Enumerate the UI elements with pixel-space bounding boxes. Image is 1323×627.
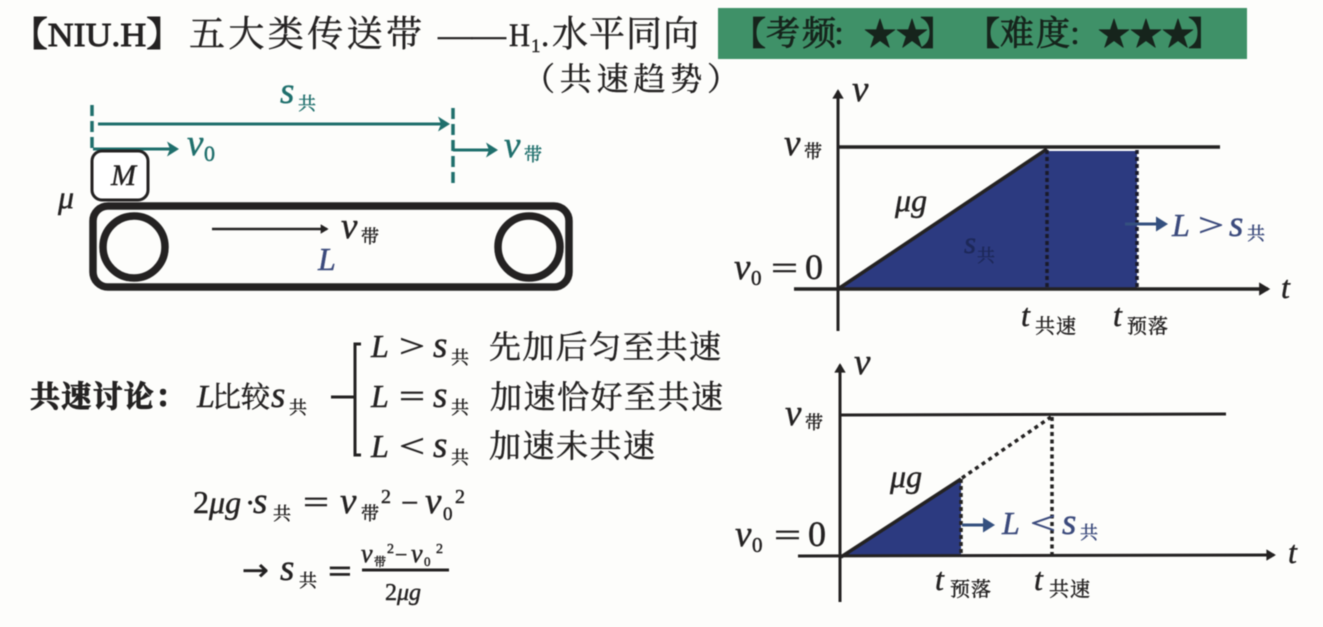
banner: exam frequency and difficulty: 【 bbox=[733, 17, 766, 53]
arrow: v0: 0 bbox=[204, 141, 215, 166]
banner: exam frequency and difficulty: ： bbox=[1068, 19, 1098, 52]
label t common: 共速 bbox=[1035, 315, 1076, 338]
bracket bbox=[331, 344, 361, 455]
label t fall: 预落 bbox=[950, 578, 991, 601]
label t common bbox=[1034, 561, 1090, 601]
case: L less: 共 bbox=[451, 448, 469, 468]
banner: exam frequency and difficulty: ★★ bbox=[864, 16, 928, 52]
title: H bbox=[509, 18, 530, 54]
case: L greater: 共 bbox=[451, 348, 469, 368]
case: L less: s bbox=[433, 425, 447, 466]
case: L greater: > bbox=[399, 329, 425, 365]
case: L less bbox=[370, 425, 655, 468]
displacement marker s: 共 bbox=[298, 94, 316, 114]
title: 1 bbox=[531, 36, 540, 57]
banner: exam frequency and difficulty bbox=[718, 8, 1247, 59]
axis label t: t bbox=[1281, 269, 1291, 305]
formula: kinematics: · bbox=[245, 485, 255, 520]
formula: common-speed distance: 2 bbox=[387, 542, 394, 557]
displacement marker s: s bbox=[280, 71, 294, 112]
formula: common-speed distance: 2 bbox=[436, 542, 443, 557]
arrow: belt speed bbox=[212, 206, 379, 247]
belt bbox=[93, 206, 569, 287]
length L: L bbox=[317, 241, 336, 277]
label v belt bbox=[785, 393, 823, 434]
label s in area bbox=[964, 225, 995, 266]
friction label: μ bbox=[57, 179, 74, 215]
case: L equal: s bbox=[433, 375, 447, 416]
formula: common-speed distance: 0 bbox=[424, 554, 430, 569]
discussion label: 共速讨论： bbox=[30, 381, 185, 414]
label s in area: 共 bbox=[977, 246, 995, 266]
formula: kinematics: − bbox=[401, 485, 418, 520]
dotted marker: common-speed time bbox=[1045, 150, 1049, 289]
callout L less: L bbox=[1001, 505, 1020, 541]
label v0: v bbox=[734, 247, 751, 288]
arrow: belt speed: 带 bbox=[361, 227, 379, 247]
formula: kinematics: v bbox=[425, 481, 442, 522]
case: L greater: s bbox=[433, 325, 447, 366]
formula: common-speed distance: 带 bbox=[374, 554, 386, 569]
label t common: t bbox=[1034, 561, 1044, 597]
callout L greater: L bbox=[1171, 207, 1190, 243]
label slope: μg bbox=[889, 458, 922, 494]
right wheel bbox=[498, 216, 560, 278]
callout L less: 共 bbox=[1080, 523, 1098, 543]
callout L greater: > bbox=[1198, 208, 1224, 244]
banner: exam frequency and difficulty: 考频 bbox=[766, 15, 837, 53]
callout L greater: s bbox=[1229, 204, 1243, 245]
formula: kinematics: 2 bbox=[193, 484, 209, 520]
title: 水平同向 bbox=[552, 14, 699, 54]
axis label v: v bbox=[852, 69, 869, 110]
case: L greater bbox=[370, 325, 721, 368]
banner: exam frequency and difficulty: 【 bbox=[967, 17, 1000, 53]
formula: kinematics: μg bbox=[208, 484, 241, 520]
shaded area bbox=[843, 479, 961, 556]
label t fall bbox=[935, 561, 991, 601]
formula: common-speed distance bbox=[242, 539, 449, 606]
formula: common-speed distance: → bbox=[242, 553, 269, 588]
label v0 bbox=[734, 247, 823, 290]
v axis bbox=[836, 91, 840, 331]
formula: kinematics: s bbox=[253, 481, 267, 522]
formula: common-speed distance: v bbox=[361, 539, 373, 568]
label s in area: s bbox=[964, 225, 976, 260]
label t common bbox=[1021, 297, 1076, 338]
case: L less: L bbox=[370, 428, 389, 464]
case: L less: < bbox=[399, 429, 425, 465]
dotted marker: fall time bbox=[1135, 150, 1139, 289]
chart: L less than s bbox=[735, 342, 1298, 602]
axis label v: v bbox=[854, 342, 871, 383]
formula: common-speed distance: μg bbox=[396, 580, 421, 606]
formula: kinematics: v bbox=[340, 481, 357, 522]
label v0: v bbox=[735, 514, 752, 555]
case: L equal: = bbox=[399, 379, 425, 415]
dotted extension bbox=[962, 417, 1051, 478]
formula: kinematics: 2 bbox=[381, 486, 391, 508]
label v belt: 带 bbox=[805, 413, 823, 433]
case: L equal: 共 bbox=[451, 398, 469, 418]
chart: L greater than s bbox=[734, 69, 1291, 338]
block M: M bbox=[110, 159, 138, 192]
case: L greater: 先加后匀至共速 bbox=[489, 329, 721, 365]
block M bbox=[92, 151, 148, 200]
discussion label: 比较 bbox=[212, 381, 271, 414]
dotted marker: common-speed time bbox=[1050, 417, 1054, 556]
label t fall: t bbox=[1113, 297, 1123, 333]
formula: common-speed distance: v bbox=[411, 539, 423, 568]
label v0 bbox=[735, 514, 826, 557]
dotted marker: fall time bbox=[959, 479, 963, 556]
panel: common-speed discussion bbox=[30, 325, 723, 468]
title: —— bbox=[437, 18, 507, 54]
label v0: = bbox=[771, 251, 798, 287]
case: L equal: 加速恰好至共速 bbox=[490, 379, 723, 415]
callout L greater bbox=[1125, 204, 1265, 245]
formula: common-speed distance: 共 bbox=[299, 571, 317, 591]
belt speed line bbox=[840, 414, 1226, 415]
banner: exam frequency and difficulty: 】 bbox=[920, 17, 953, 53]
banner: exam frequency and difficulty: ： bbox=[832, 19, 862, 52]
panel: conveyor belt diagram bbox=[57, 71, 569, 287]
label v belt bbox=[784, 123, 822, 164]
formula: kinematics: = bbox=[303, 485, 329, 521]
slope line bbox=[841, 479, 961, 557]
axis label t: t bbox=[1288, 534, 1298, 570]
formula: common-speed distance: = bbox=[328, 554, 352, 590]
formula: common-speed distance: s bbox=[280, 548, 294, 589]
arrow: v belt: v bbox=[504, 125, 521, 166]
formula: kinematics: 共 bbox=[273, 504, 291, 524]
case: L equal: L bbox=[370, 378, 389, 414]
label v0: 0 bbox=[805, 247, 823, 287]
label t fall: t bbox=[935, 561, 945, 597]
formula: kinematics: 0 bbox=[443, 504, 452, 525]
banner: exam frequency and difficulty: ★★★ bbox=[1098, 16, 1194, 52]
discussion label bbox=[30, 375, 307, 418]
discussion label: L bbox=[196, 378, 215, 414]
label v0: 0 bbox=[752, 533, 762, 557]
formula: kinematics bbox=[193, 481, 465, 525]
discussion label: s bbox=[271, 375, 285, 416]
v axis bbox=[838, 365, 842, 602]
title bbox=[12, 14, 699, 57]
label t fall bbox=[1113, 297, 1168, 338]
formula: common-speed distance: 2 bbox=[385, 580, 397, 606]
title: 【NIU.H】 bbox=[12, 17, 182, 54]
title: 五大类传送带 bbox=[189, 14, 422, 54]
label slope: μg bbox=[894, 182, 927, 218]
shaded area bbox=[840, 151, 1137, 288]
label v0: 0 bbox=[751, 266, 762, 290]
title: . bbox=[541, 18, 549, 54]
displacement marker s bbox=[92, 71, 453, 184]
case: L equal bbox=[370, 375, 723, 418]
t axis bbox=[798, 555, 1274, 556]
callout L less bbox=[962, 502, 1098, 543]
formula: kinematics: 2 bbox=[455, 486, 465, 508]
arrow: v belt: 带 bbox=[524, 145, 542, 165]
formula: common-speed distance: − bbox=[395, 542, 407, 567]
belt speed line bbox=[838, 145, 1220, 149]
case: L greater: L bbox=[370, 328, 389, 364]
arrow: v0 bbox=[93, 123, 215, 166]
callout L less: < bbox=[1030, 506, 1056, 542]
label t common: t bbox=[1021, 297, 1031, 333]
discussion label: 共 bbox=[289, 398, 307, 418]
banner: exam frequency and difficulty: 难度 bbox=[1000, 15, 1070, 53]
left wheel bbox=[103, 216, 165, 278]
label v belt: v bbox=[785, 393, 802, 434]
label t fall: 预落 bbox=[1127, 315, 1168, 338]
arrow: v0: v bbox=[187, 123, 204, 164]
label v0: 0 bbox=[808, 514, 826, 554]
banner: exam frequency and difficulty: 】 bbox=[1188, 17, 1221, 53]
label v0: = bbox=[774, 518, 801, 554]
callout L greater: 共 bbox=[1247, 224, 1265, 244]
label v belt: v bbox=[784, 123, 801, 164]
callout L less: s bbox=[1062, 502, 1076, 543]
slope line bbox=[838, 149, 1047, 289]
label t common: 共速 bbox=[1049, 578, 1090, 601]
arrow: v belt bbox=[453, 125, 542, 166]
t axis bbox=[794, 287, 1268, 291]
label v belt: 带 bbox=[804, 142, 822, 162]
formula: kinematics: 带 bbox=[361, 504, 379, 524]
subtitle: （共速趋势） bbox=[523, 61, 739, 97]
arrow: belt speed: v bbox=[341, 206, 358, 247]
case: L less: 加速未共速 bbox=[489, 428, 655, 464]
